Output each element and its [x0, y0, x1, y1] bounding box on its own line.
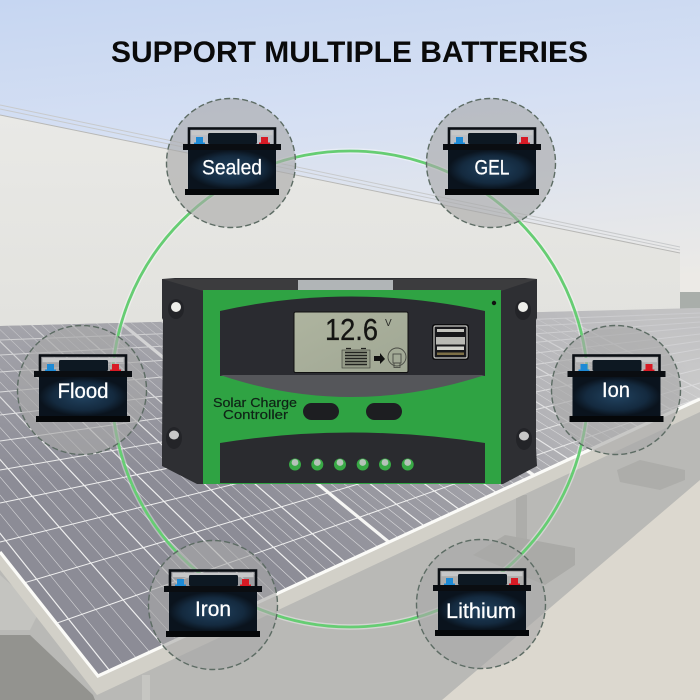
icon: battery — [183, 128, 281, 195]
silver label on top — [298, 280, 393, 290]
background: light concrete floor — [442, 480, 700, 700]
label: Lithium: Lithium — [446, 600, 516, 623]
icon: LCD arrow — [374, 353, 385, 364]
upper display panel — [220, 296, 485, 376]
label: Ion: Ion — [602, 379, 630, 402]
icon: battery — [433, 570, 531, 636]
badge: Ion battery — [552, 326, 680, 454]
voltage reading: 12.6 — [325, 312, 378, 347]
badge: Lithium battery — [416, 540, 546, 668]
background: distant trees — [680, 292, 700, 310]
mounting holes — [166, 299, 532, 450]
USB ports — [432, 324, 469, 360]
solar panel array — [0, 308, 700, 695]
green faceplate — [203, 290, 501, 484]
icon: battery — [34, 356, 132, 422]
badge: Flood battery — [18, 326, 146, 454]
background: sky — [0, 0, 700, 330]
LCD screen — [294, 312, 408, 372]
icon: battery — [568, 356, 666, 422]
solar charge controller — [162, 278, 537, 484]
icon: LCD battery — [342, 348, 370, 368]
badge: Iron battery — [148, 540, 278, 670]
product label: Solar Charge — [213, 395, 297, 410]
status dot — [492, 301, 496, 305]
product label — [213, 395, 297, 422]
grey lower curve of display panel — [220, 375, 485, 397]
label: Sealed: Sealed — [202, 156, 262, 180]
lower terminal panel — [220, 432, 485, 483]
badge: Sealed battery — [166, 98, 296, 228]
product label: Controller — [223, 407, 289, 422]
label: GEL: GEL — [474, 156, 510, 180]
title: SUPPORT MULTIPLE BATTERIES — [111, 36, 588, 69]
indicator LEDs — [289, 458, 414, 470]
badge: GEL battery — [426, 98, 556, 228]
background: mounting posts and pads — [0, 460, 685, 700]
icon: battery — [164, 570, 262, 637]
icon: LCD bulb — [388, 348, 406, 368]
controller casing — [162, 278, 537, 484]
green connecting ring — [112, 151, 588, 627]
label: Iron: Iron — [195, 598, 231, 621]
buttons — [303, 403, 402, 420]
casing top strip — [162, 279, 537, 291]
icon: battery — [443, 128, 541, 195]
background: rooftop ground — [0, 326, 700, 700]
label: Flood: Flood — [58, 380, 108, 403]
background: building wall — [0, 105, 680, 326]
volt unit: V — [385, 318, 392, 329]
